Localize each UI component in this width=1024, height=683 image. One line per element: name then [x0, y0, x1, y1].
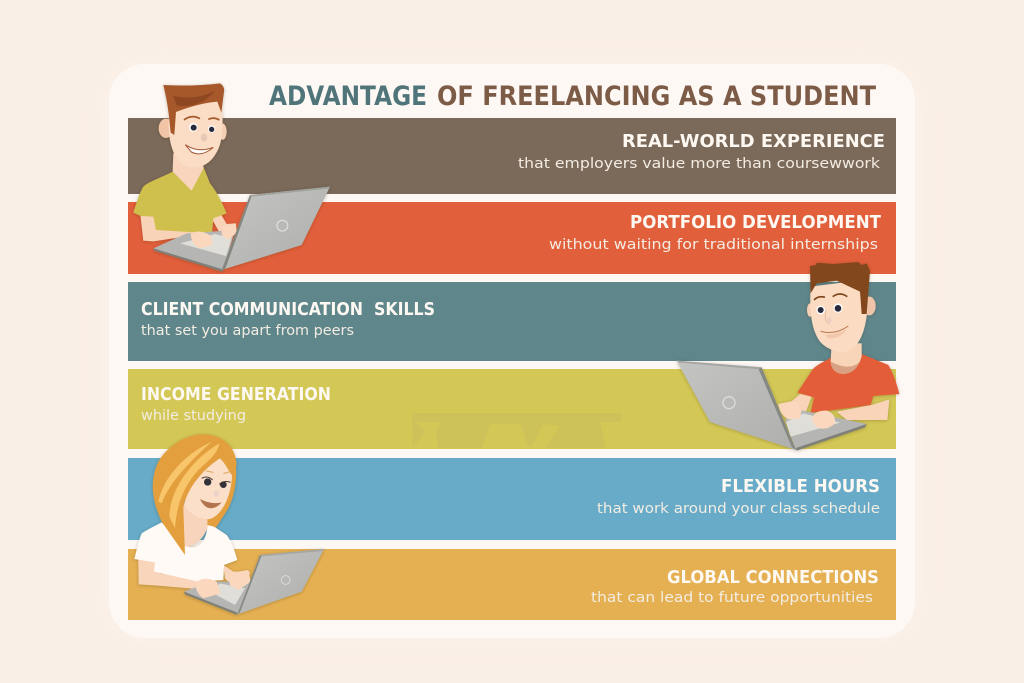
hair back	[183, 434, 236, 529]
eyes and brows	[816, 306, 825, 314]
band: flexible hours	[128, 458, 896, 540]
band: global connections: GLOBAL CONNECTIONS	[667, 567, 879, 588]
band: flexible hours: that work around your class schedule	[597, 501, 880, 517]
nose and smile	[201, 134, 207, 142]
band: income generation: INCOME GENERATION	[141, 384, 331, 405]
eyes and brows	[204, 478, 211, 486]
ears	[159, 119, 173, 138]
laptop base	[785, 410, 867, 450]
laptop base	[184, 582, 255, 614]
laptop base	[153, 230, 235, 270]
arms	[138, 558, 250, 589]
laptop lid	[237, 549, 324, 614]
hands	[191, 223, 237, 248]
hair	[810, 262, 870, 314]
face	[169, 98, 223, 168]
shirt	[133, 167, 227, 233]
laptop lid	[222, 187, 330, 270]
hands	[195, 570, 251, 598]
hands	[778, 401, 835, 429]
hair	[163, 83, 224, 135]
nose and smile	[825, 310, 829, 324]
title: ADVANTAGE	[269, 81, 427, 112]
illustration: man in olive shirt with laptop	[133, 83, 330, 272]
illustration: woman in white shirt with laptop	[134, 434, 324, 615]
nose and mouth	[213, 490, 219, 497]
arms	[782, 394, 889, 420]
band: client communication skills	[128, 282, 896, 361]
neck	[179, 505, 207, 547]
band: portfolio development: without waiting for traditional internships	[549, 237, 878, 253]
neck	[831, 343, 862, 374]
band: client communication skills: that set you apart from peers	[141, 323, 354, 339]
hair front	[153, 434, 237, 555]
eyes and brows	[189, 123, 198, 132]
illustration: man in red shirt with laptop	[677, 262, 899, 451]
hair highlights	[158, 442, 219, 528]
arms	[140, 212, 235, 241]
face	[810, 280, 867, 352]
band: real-world experience	[128, 118, 896, 194]
band: real-world experience: that employers value more than coursewwork	[518, 156, 881, 172]
band: client communication skills: CLIENT COMMUNICATION SKILLS	[141, 299, 435, 320]
face	[184, 458, 232, 519]
ears	[863, 297, 876, 315]
shirt	[134, 522, 237, 582]
band: portfolio development	[128, 202, 896, 274]
band: portfolio development: PORTFOLIO DEVELOPMENT	[630, 212, 882, 233]
title	[269, 81, 877, 112]
laptop lid	[677, 361, 796, 450]
band: global connections	[128, 549, 896, 620]
background panel	[100, 56, 924, 646]
shirt	[797, 353, 899, 413]
band: real-world experience: REAL-WORLD EXPERIENCE	[622, 131, 885, 152]
band: flexible hours: FLEXIBLE HOURS	[721, 476, 880, 497]
band: income generation: while studying	[141, 408, 246, 424]
band: income generation	[128, 369, 896, 449]
band: global connections: that can lead to future opportunities	[591, 590, 873, 606]
title: OF FREELANCING AS A STUDENT	[437, 81, 877, 112]
neck	[173, 153, 203, 191]
